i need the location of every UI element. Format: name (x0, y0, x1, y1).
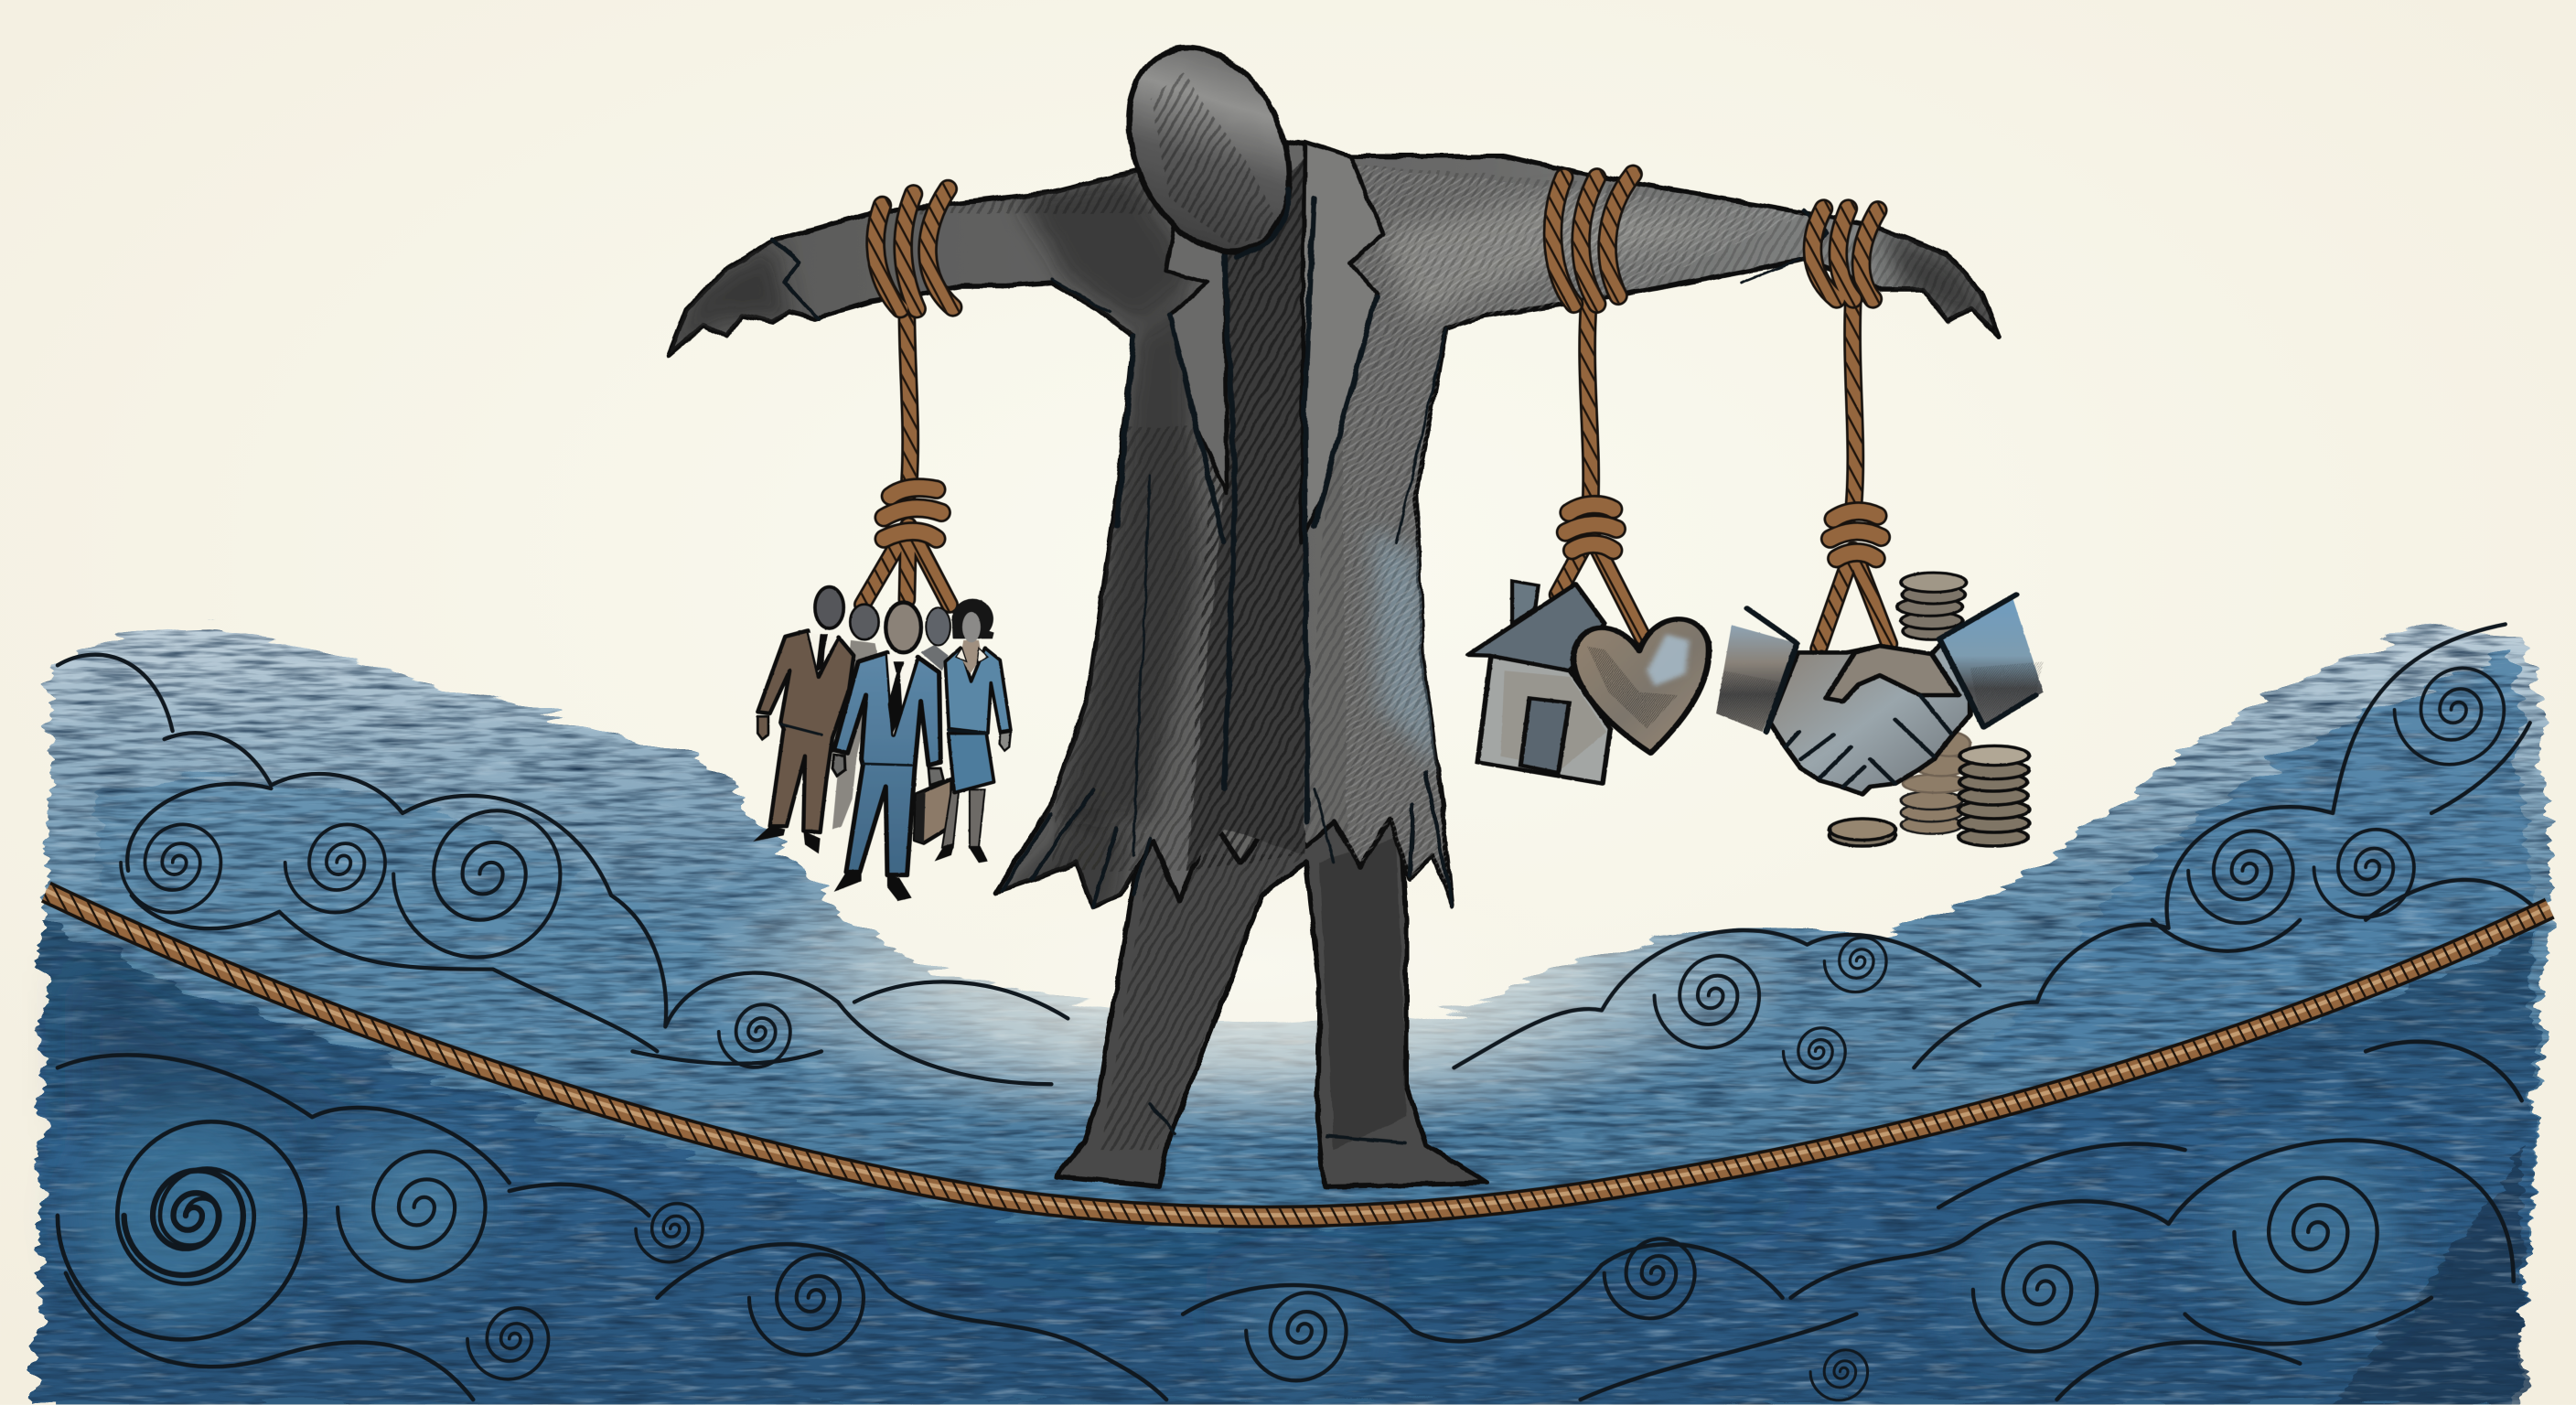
rear lower coin stack (1901, 732, 1970, 834)
icon: stacked coins (1830, 573, 2030, 846)
tonal patches in the deep water (82, 970, 2399, 1387)
upper coin stack (1897, 573, 1967, 639)
woman in blue skirt suit (935, 599, 1011, 863)
left cuff (1716, 625, 1797, 732)
rope: middle wrap and hanging line to house and heart (1552, 174, 1643, 638)
rope: right wrap and hanging line to handshake and coins (1812, 209, 1889, 649)
single coin (1830, 819, 1895, 846)
swirling waves: upper left (58, 655, 1068, 1084)
sea: upper pale water behind the rope (46, 628, 2549, 1249)
pale mist around the figure (690, 797, 1807, 1142)
figure: dark shirt and lapels (1051, 141, 1799, 871)
tightrope (46, 890, 2549, 1217)
figure: coat, arms and torn hem (657, 141, 2004, 920)
clasped hands (1770, 643, 1970, 794)
right cuff (1939, 597, 2044, 727)
rope: left wrap and hanging line to the people (863, 189, 953, 605)
base of the deep water along the bottom edge (56, 1347, 2504, 1404)
coat shading and hatching (657, 165, 2004, 920)
man in brown suit (753, 587, 853, 853)
back figures (832, 605, 950, 830)
figure: bowed faceless head (1098, 22, 1320, 277)
icon: heart (1573, 619, 1709, 753)
sea: deep water below the rope (33, 920, 2537, 1404)
figure: legs and feet (1057, 788, 1487, 1186)
man in blue suit with briefcase (832, 603, 952, 901)
icon: house hanging behind heart (1468, 581, 1610, 784)
front coin stack (1959, 745, 2030, 846)
icon: handshake (1716, 595, 2044, 794)
icon: group of business people (753, 587, 1011, 901)
swirling waves: lower band (58, 1042, 2522, 1400)
torn sleeve cuff and hem shreds (772, 210, 1827, 906)
swirling waves: upper right (1454, 624, 2547, 1082)
